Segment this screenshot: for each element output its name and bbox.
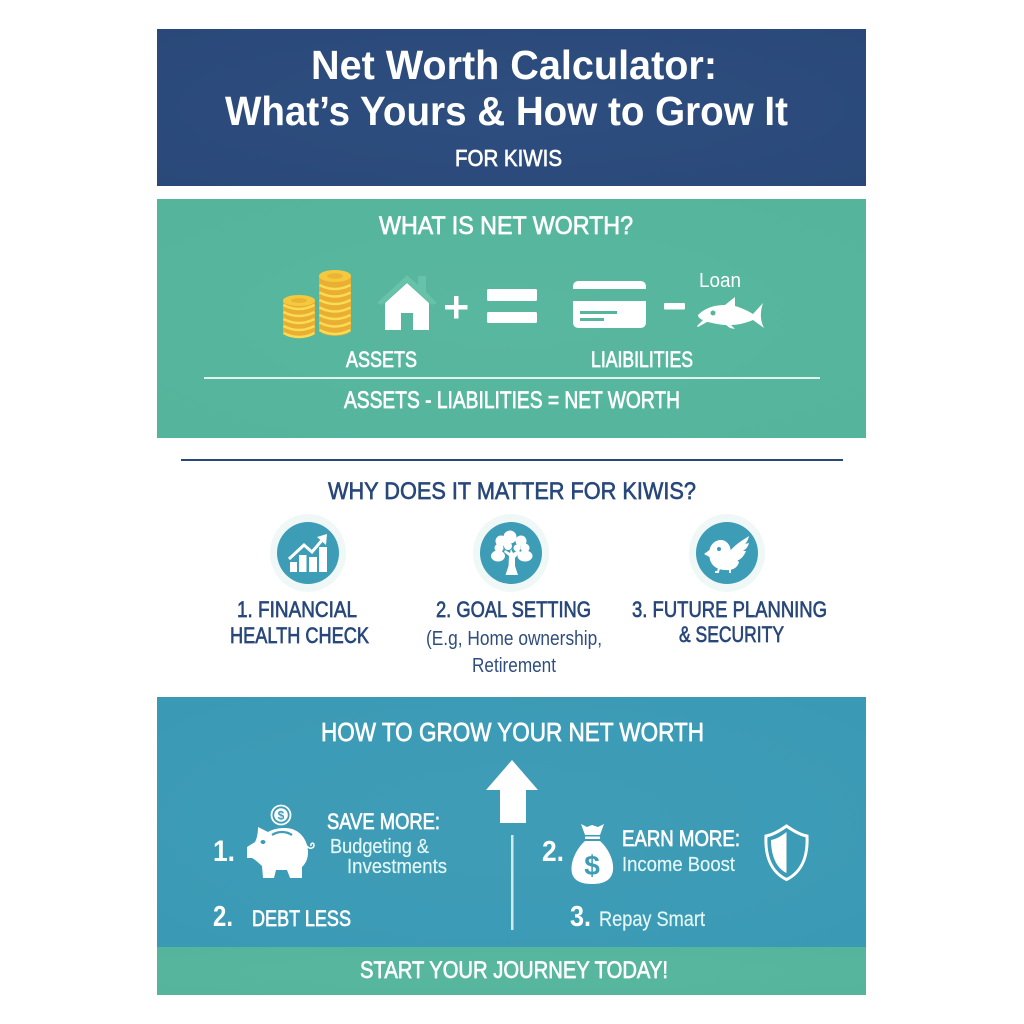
call to action bar: START YOUR JOURNEY TODAY! bbox=[360, 957, 668, 984]
item: future planning bbox=[632, 514, 827, 647]
header panel bbox=[157, 29, 866, 186]
icon: coin stacks bbox=[283, 270, 351, 338]
icon: money bag: $ bbox=[584, 850, 600, 881]
subtitle: FOR KIWIS bbox=[455, 145, 562, 171]
panel: what is net worth bbox=[157, 199, 866, 438]
panel: why does it matter bbox=[230, 478, 827, 677]
step: save more bbox=[213, 806, 447, 878]
call to action bar bbox=[157, 947, 866, 995]
step: debt less: DEBT LESS bbox=[252, 906, 351, 931]
step: repay smart: 3. bbox=[570, 901, 591, 933]
number 2: 2. bbox=[542, 836, 564, 868]
label: financial health check: HEALTH CHECK bbox=[230, 623, 369, 648]
label: future planning bbox=[632, 597, 827, 647]
title: What’s Yours & How to Grow It bbox=[225, 88, 788, 134]
title bbox=[225, 42, 788, 134]
icon: shield bbox=[766, 826, 807, 880]
label: save more: SAVE MORE: bbox=[327, 809, 440, 834]
arrow: up bbox=[486, 760, 538, 823]
label: goal setting: Retirement bbox=[472, 655, 556, 677]
heading: why it matters: WHY DOES IT MATTER FOR KIWIS? bbox=[328, 478, 696, 505]
number 1: 1. bbox=[213, 835, 235, 868]
label: goal setting: 2. GOAL SETTING bbox=[436, 597, 591, 622]
icon: growth chart bbox=[270, 514, 346, 592]
equals sign bbox=[487, 289, 537, 323]
label: goal setting bbox=[426, 597, 602, 677]
panel: how to grow bbox=[157, 697, 866, 947]
label: future planning: & SECURITY bbox=[679, 622, 784, 647]
label: liabilities: LIAIBILITIES bbox=[591, 347, 693, 372]
icon: piggy bank: $ bbox=[278, 808, 285, 822]
label: save more: Budgeting & bbox=[330, 836, 430, 858]
label: earn more: EARN MORE: bbox=[622, 826, 740, 851]
label: financial health check: 1. FINANCIAL bbox=[237, 597, 357, 622]
heading: what is net worth: WHAT IS NET WORTH? bbox=[379, 212, 633, 240]
label: earn more bbox=[622, 826, 740, 876]
label: future planning: 3. FUTURE PLANNING bbox=[632, 597, 827, 622]
icon: piggy bank bbox=[247, 806, 314, 878]
step: debt less bbox=[213, 901, 351, 933]
label: assets: ASSETS bbox=[346, 347, 417, 372]
plus sign bbox=[445, 296, 468, 318]
step: repay smart bbox=[570, 901, 705, 933]
label: save more: Investments bbox=[347, 856, 447, 878]
step: debt less: 2. bbox=[213, 901, 233, 933]
label: earn more: Income Boost bbox=[622, 854, 735, 876]
formula: ASSETS - LIABILITIES = NET WORTH bbox=[344, 387, 680, 414]
heading: how to grow: HOW TO GROW YOUR NET WORTH bbox=[321, 717, 704, 747]
icon: bird bbox=[689, 514, 765, 592]
step: repay smart: Repay Smart bbox=[599, 908, 705, 931]
minus sign bbox=[664, 303, 685, 310]
item: goal setting bbox=[426, 514, 602, 677]
label: save more bbox=[327, 809, 447, 878]
item: financial health check bbox=[230, 514, 369, 648]
icon: money bag bbox=[571, 824, 613, 884]
step: earn more bbox=[542, 824, 807, 884]
icon: tree bbox=[473, 514, 549, 592]
icon: house bbox=[377, 275, 437, 330]
loan label: Loan bbox=[699, 270, 741, 292]
title: Net Worth Calculator: bbox=[311, 42, 717, 88]
icon: credit card bbox=[573, 281, 646, 328]
label: goal setting: (E.g, Home ownership, bbox=[426, 628, 602, 650]
label: financial health check bbox=[230, 597, 369, 648]
icon: fish bbox=[697, 297, 764, 329]
